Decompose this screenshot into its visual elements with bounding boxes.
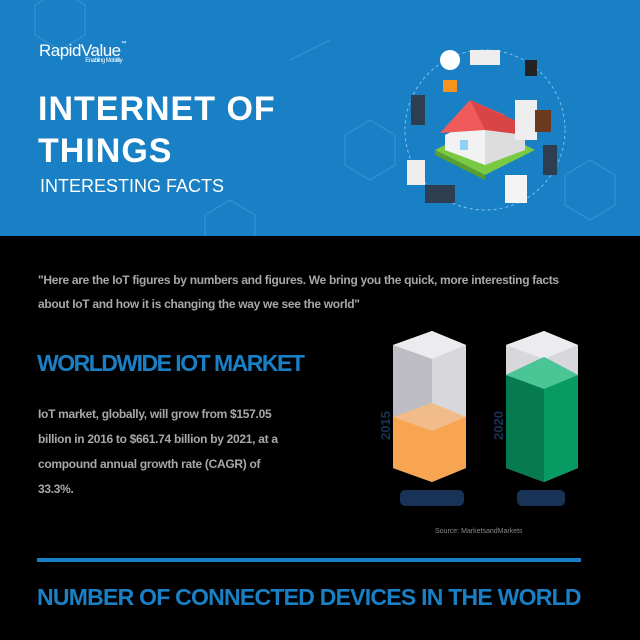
- illustration: smart home devices: [404, 50, 566, 210]
- quote text: "Here are the IoT figures by numbers and figures. We bring you the quick, more interesting facts about IoT and how it is changing the way we see the world": [38, 273, 559, 311]
- value labels: [400, 490, 565, 506]
- heading: connected devices: NUMBER OF CONNECTED DEVICES IN THE WORLD: [37, 584, 581, 610]
- divider line: [37, 558, 581, 562]
- subtitle: INTERESTING FACTS: [40, 176, 224, 196]
- title: THINGS: [38, 132, 172, 170]
- year labels: 2020: [491, 411, 506, 440]
- logo: Enabling Mobility: [85, 58, 122, 64]
- bar 2020: [506, 331, 578, 482]
- year labels: 2015: [378, 411, 393, 440]
- bar 2015: [393, 331, 466, 482]
- market description: IoT market, globally, will grow from $157.05 billion in 2016 to $661.74 billion by 2021, at a compound annual growth rate (CAGR) of 33.3%.: [38, 407, 278, 496]
- title: [38, 90, 276, 170]
- heading: worldwide iot market: WORLDWIDE IOT MARKET: [37, 350, 303, 376]
- source: Source: MarketsandMarkets: [435, 528, 523, 535]
- bar chart: [378, 331, 578, 535]
- logo: RapidValue™: [39, 41, 126, 60]
- title: INTERNET OF: [38, 90, 276, 128]
- header banner: [0, 0, 640, 236]
- year labels: [378, 411, 506, 440]
